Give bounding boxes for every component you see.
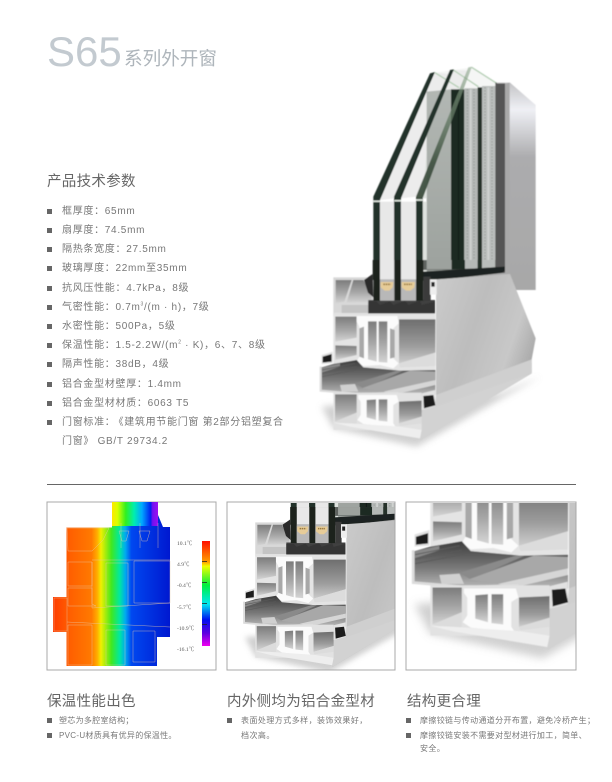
column heading: aluminium: 内外侧均为铝合金型材	[227, 694, 375, 710]
temperature labels: 10.1℃	[177, 540, 193, 547]
panel: structure detail	[406, 502, 576, 670]
title: S65: S65	[47, 28, 122, 75]
column text: thermal: PVC-U材质具有优异的保温性。	[59, 731, 177, 740]
thermal map	[53, 502, 170, 666]
list: technical parameters: 隔声性能：38dB，4级	[62, 359, 169, 370]
list: technical parameters: 隔热条宽度：27.5mm	[62, 244, 167, 255]
list: technical parameters: 气密性能：0.7m3/(m · h)，7级	[62, 302, 210, 313]
panel: aluminium profile detail	[226, 502, 396, 670]
temperature labels: -0.4℃	[177, 582, 192, 589]
column text: structure: 摩擦铰链安装不需要对型材进行加工，简单、	[420, 731, 587, 740]
column text: aluminium: 表面处理方式多样，装饰效果好，	[241, 716, 368, 725]
list: technical parameters: 扇厚度：74.5mm	[62, 225, 145, 236]
panel: thermal simulation	[47, 502, 216, 670]
list: technical parameters: 门窗》 GB/T 29734.2	[62, 436, 168, 447]
temperature labels: -10.9℃	[177, 625, 195, 632]
column text: structure	[406, 716, 595, 753]
temperature labels: -5.7℃	[177, 604, 192, 611]
column text: structure: 摩擦铰链与传动通道分开布置，避免冷桥产生；	[420, 716, 595, 725]
temperature labels	[177, 540, 195, 653]
column heading: thermal: 保温性能出色	[47, 694, 136, 710]
list: technical parameters	[47, 205, 284, 447]
heading: technical parameters: 产品技术参数	[47, 174, 136, 190]
list: technical parameters: 铝合金型材材质：6063 T5	[62, 398, 189, 409]
column text: aluminium: 档次高。	[241, 731, 275, 740]
main image: window section	[321, 67, 540, 447]
temperature labels: 4.9℃	[177, 561, 190, 568]
list: technical parameters: 保温性能：1.5-2.2W/(m2 · K)，6、7、8级	[62, 340, 266, 351]
list: technical parameters: 玻璃厚度：22mm至35mm	[62, 263, 187, 274]
subtitle: series name: 系列外开窗	[124, 48, 217, 69]
list: technical parameters: 水密性能：500Pa，5级	[62, 321, 176, 332]
column text: aluminium	[227, 716, 368, 740]
column heading: structure: 结构更合理	[407, 694, 481, 710]
column text: structure: 安全。	[420, 744, 445, 753]
list: technical parameters: 门窗标准： 《建筑用节能门窗 第2部分铝塑复合	[62, 417, 284, 428]
list: technical parameters: 框厚度：65mm	[62, 206, 135, 217]
list: technical parameters: 铝合金型材壁厚：1.4mm	[62, 379, 182, 390]
temperature labels: -16.1℃	[177, 646, 195, 653]
list: technical parameters: 抗风压性能：4.7kPa，8级	[62, 283, 189, 294]
column text: thermal: 塑芯为多腔室结构；	[59, 716, 134, 725]
column text: thermal	[47, 716, 177, 740]
colour scale	[202, 541, 210, 646]
figure: window profile and detail panels	[46, 66, 576, 670]
